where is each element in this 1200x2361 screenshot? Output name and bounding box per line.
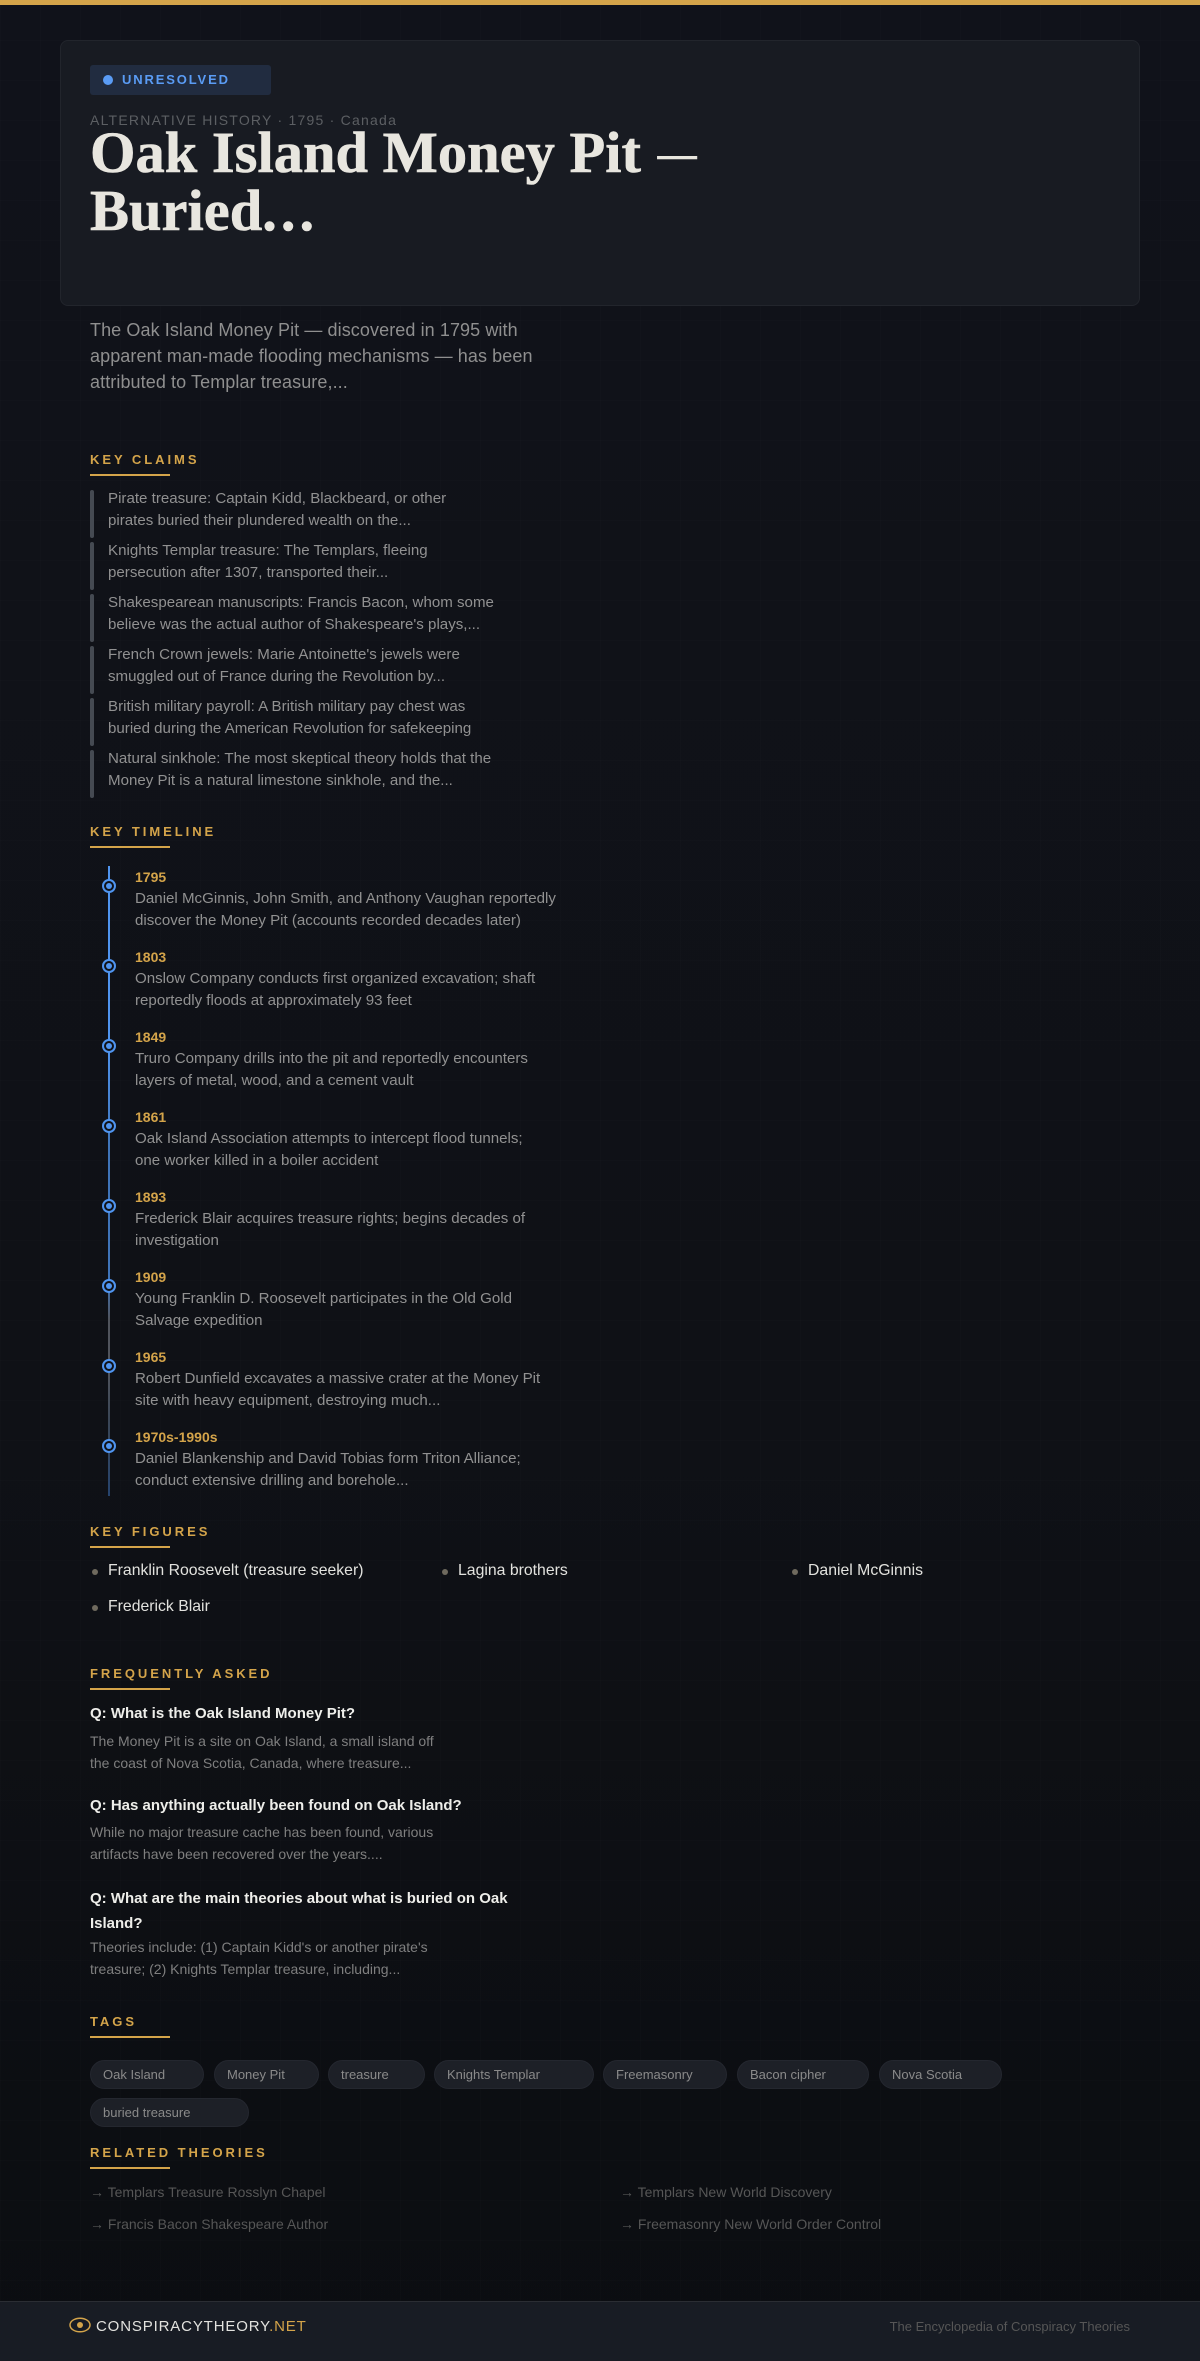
event 1909: [102, 1269, 512, 1329]
event 1849: Truro Company drills into the pit and reportedly encounters: [135, 1050, 528, 1067]
heading: frequently asked: FREQUENTLY ASKED: [90, 1666, 273, 1681]
event 1909: Salvage expedition: [135, 1312, 263, 1329]
event 1803: 1803: [135, 949, 166, 965]
faq item 3: Q: What are the main theories about what is buried on Oak: [90, 1890, 508, 1907]
related link: → Templars New World Discovery: [620, 2184, 832, 2200]
heading: tags: TAGS: [90, 2014, 137, 2029]
event 1970s-1990s: [102, 1429, 521, 1489]
footer tagline: The Encyclopedia of Conspiracy Theories: [890, 2319, 1130, 2334]
tag: [879, 2060, 1002, 2089]
claim: manuscripts: Shakespearean manuscripts: Francis Bacon, whom some: [108, 594, 494, 611]
event 1893: 1893: [135, 1189, 166, 1205]
tag: [90, 2098, 249, 2127]
footer logo: [69, 2318, 307, 2335]
tag: [214, 2060, 319, 2089]
tag: [603, 2060, 727, 2089]
faq item 3: [90, 1890, 508, 1977]
tag: [737, 2060, 869, 2089]
event 1795: Daniel McGinnis, John Smith, and Anthony Vaughan reportedly: [135, 890, 556, 907]
claim: natural sinkhole: Money Pit is a natural limestone sinkhole, and the...: [108, 772, 453, 789]
top accent bar: [0, 0, 1200, 5]
event 1970s-1990s: Daniel Blankenship and David Tobias form Triton Alliance;: [135, 1450, 521, 1467]
event 1861: [102, 1109, 523, 1169]
faq item 3: Island?: [90, 1915, 143, 1932]
claim: manuscripts: [90, 594, 494, 642]
event 1965: Robert Dunfield excavates a massive crater at the Money Pit: [135, 1370, 540, 1387]
claim: templar treasure: [90, 542, 428, 590]
event 1893: Frederick Blair acquires treasure rights; begins decades of: [135, 1210, 525, 1227]
tag: buried treasure: [103, 2105, 190, 2120]
event 1965: 1965: [135, 1349, 166, 1365]
related link: → Freemasonry New World Order Control: [620, 2216, 881, 2232]
tag: Nova Scotia: [892, 2067, 962, 2082]
footer: [0, 2301, 1200, 2361]
panel: key claims list: [90, 490, 494, 798]
timeline: [102, 866, 556, 1496]
status badge: [90, 65, 271, 95]
heading: key figures: KEY FIGURES: [90, 1524, 210, 1539]
summary text: attributed to Templar treasure,...: [90, 372, 348, 392]
tag: Money Pit: [227, 2067, 285, 2082]
tag: Bacon cipher: [750, 2067, 826, 2082]
tag: Knights Templar: [447, 2067, 540, 2082]
tag: [90, 2060, 204, 2089]
title: [90, 120, 698, 243]
figure: McGinnis: Daniel McGinnis: [808, 1562, 923, 1579]
faq item 1: [90, 1705, 434, 1771]
claim: pirate treasure: Pirate treasure: Captain Kidd, Blackbeard, or other: [108, 490, 446, 507]
logo wordmark: CONSPIRACYTHEORY.NET: [96, 2318, 307, 2335]
category meta line: ALTERNATIVE HISTORY · 1795 · Canada: [90, 112, 397, 128]
timeline spine: [108, 866, 110, 1496]
faq item 3: treasure; (2) Knights Templar treasure, including...: [90, 1961, 400, 1977]
faq item 1: The Money Pit is a site on Oak Island, a small island off: [90, 1733, 434, 1749]
claim: british payroll: [90, 698, 471, 746]
title: Oak Island Money Pit —: [90, 120, 697, 185]
icon: status dot: [103, 75, 113, 85]
event 1970s-1990s: 1970s-1990s: [135, 1429, 218, 1445]
claim: manuscripts: believe was the actual author of Shakespeare's plays,...: [108, 616, 480, 633]
claim: natural sinkhole: [90, 750, 491, 798]
event 1893: investigation: [135, 1232, 219, 1249]
event 1849: 1849: [135, 1029, 166, 1045]
claim: natural sinkhole: Natural sinkhole: The most skeptical theory holds that the: [108, 750, 491, 767]
related link: → Francis Bacon Shakespeare Author: [90, 2216, 328, 2232]
claim: pirate treasure: [90, 490, 446, 538]
tag: Oak Island: [103, 2067, 165, 2082]
faq item 1: Q: What is the Oak Island Money Pit?: [90, 1705, 355, 1722]
event 1849: [102, 1029, 528, 1089]
claim: british payroll: buried during the American Revolution for safekeeping: [108, 720, 471, 737]
event 1861: Oak Island Association attempts to intercept flood tunnels;: [135, 1130, 523, 1147]
panel: hero header: [60, 40, 1140, 306]
event 1965: site with heavy equipment, destroying much...: [135, 1392, 440, 1409]
summary text: apparent man-made flooding mechanisms — has been: [90, 346, 533, 366]
panel: related theories: [90, 2184, 881, 2232]
event 1849: layers of metal, wood, and a cement vault: [135, 1072, 414, 1089]
tag: [328, 2060, 425, 2089]
summary text: [90, 320, 533, 392]
event 1795: 1795: [135, 869, 166, 885]
summary text: The Oak Island Money Pit — discovered in 1795 with: [90, 320, 518, 340]
claim: british payroll: British military payroll: A British military pay chest was: [108, 698, 465, 715]
claim: templar treasure: Knights Templar treasure: The Templars, fleeing: [108, 542, 428, 559]
event 1893: [102, 1189, 526, 1249]
figure: Roosevelt: Franklin Roosevelt (treasure seeker): [108, 1562, 363, 1579]
tag: treasure: [341, 2067, 389, 2082]
icon: eye: [69, 2318, 91, 2332]
claim: templar treasure: persecution after 1307, transported their...: [108, 564, 388, 581]
tag: Freemasonry: [616, 2067, 693, 2082]
heading: key claims: KEY CLAIMS: [90, 452, 199, 467]
faq item 2: [90, 1797, 462, 1862]
panel: faq: [90, 1705, 508, 1977]
panel: tags: [90, 2060, 1002, 2127]
event 1861: 1861: [135, 1109, 166, 1125]
event 1803: Onslow Company conducts first organized excavation; shaft: [135, 970, 535, 987]
claim: french jewels: smuggled out of France during the Revolution by...: [108, 668, 445, 685]
figure: Blair: Frederick Blair: [108, 1598, 210, 1615]
related link: → Templars Treasure Rosslyn Chapel: [90, 2184, 326, 2200]
faq item 1: the coast of Nova Scotia, Canada, where treasure...: [90, 1755, 411, 1771]
event 1970s-1990s: conduct extensive drilling and borehole...: [135, 1472, 409, 1489]
event 1965: [102, 1349, 540, 1409]
claim: french jewels: [90, 646, 460, 694]
faq item 2: Q: Has anything actually been found on Oak Island?: [90, 1797, 462, 1814]
tag: [434, 2060, 594, 2089]
event 1795: [102, 869, 556, 929]
event 1803: [102, 949, 536, 1009]
heading: related theories: RELATED THEORIES: [90, 2145, 268, 2160]
event 1861: one worker killed in a boiler accident: [135, 1152, 378, 1169]
event 1795: discover the Money Pit (accounts recorded decades later): [135, 912, 521, 929]
panel: key figures: [92, 1562, 923, 1615]
event 1909: Young Franklin D. Roosevelt participates in the Old Gold: [135, 1290, 512, 1307]
figure: Lagina brothers: Lagina brothers: [458, 1562, 568, 1579]
faq item 2: artifacts have been recovered over the years....: [90, 1846, 383, 1862]
event 1909: 1909: [135, 1269, 166, 1285]
faq item 3: Theories include: (1) Captain Kidd's or another pirate's: [90, 1939, 428, 1955]
title: Buried...: [90, 178, 318, 243]
claim: french jewels: French Crown jewels: Marie Antoinette's jewels were: [108, 646, 460, 663]
event 1803: reportedly floods at approximately 93 feet: [135, 992, 412, 1009]
badge label: UNRESOLVED: [122, 72, 230, 87]
faq item 2: While no major treasure cache has been found, various: [90, 1824, 433, 1840]
claim: pirate treasure: pirates buried their plundered wealth on the...: [108, 512, 411, 529]
heading: key timeline: KEY TIMELINE: [90, 824, 216, 839]
